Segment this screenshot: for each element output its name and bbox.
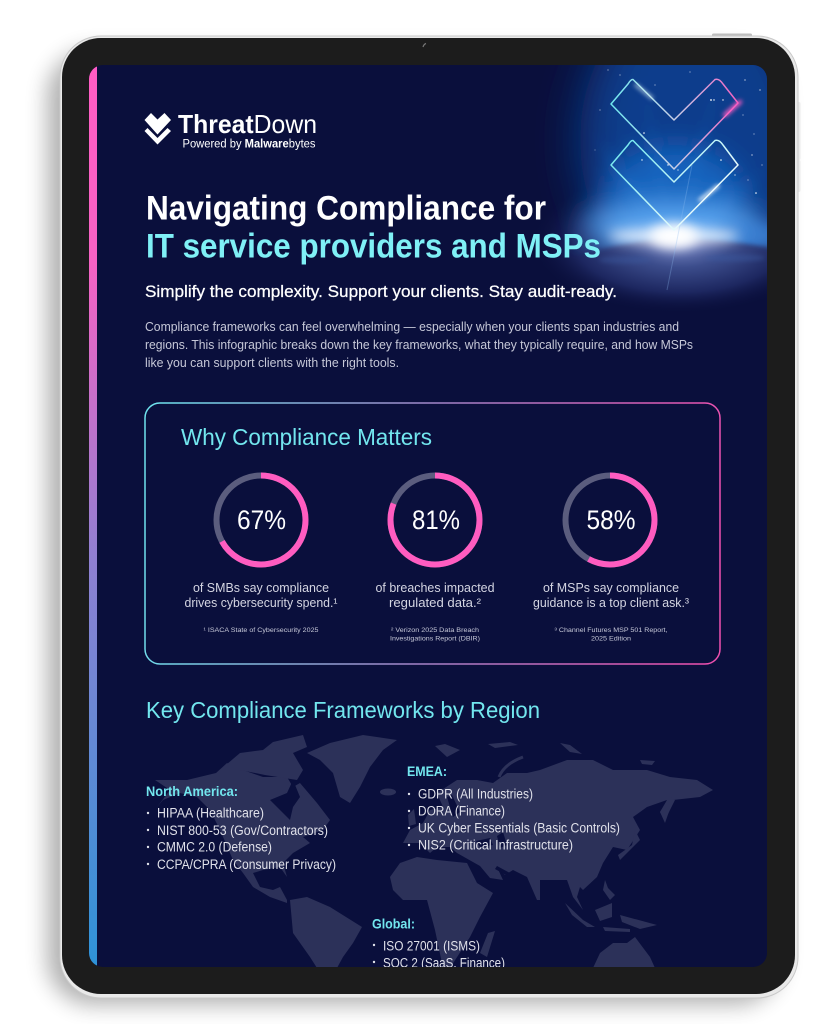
stat: 67%: ¹ ISACA State of Cybersecurity 2025: [204, 627, 319, 634]
region: north america: North America:: [146, 784, 238, 799]
panel heading: Why Compliance Matters: [181, 424, 432, 450]
region: global: ISO 27001 (ISMS): [383, 938, 480, 954]
section heading: frameworks by region: Key Compliance Frameworks by Region: [146, 697, 540, 723]
stat: 58%: of MSPs say compliance: [543, 581, 679, 595]
stat: 81%: regulated data.²: [389, 596, 481, 610]
region: north america: NIST 800-53 (Gov/Contractors): [157, 823, 328, 838]
screen: [89, 65, 767, 967]
stat: 67%: of SMBs say compliance: [193, 581, 329, 595]
stat: 81%: [376, 476, 495, 642]
logo tagline: Powered by Malwarebytes: [182, 138, 316, 150]
panel: why compliance matters: [145, 403, 720, 664]
hero earth: [552, 206, 767, 304]
neon chevrons logo: [611, 79, 740, 230]
title: IT service providers and MSPs: [146, 228, 601, 266]
stat: 58%: 2025 Edition: [591, 636, 631, 642]
stat: 81%: ² Verizon 2025 Data Breach: [391, 627, 479, 634]
title: [146, 190, 601, 266]
stat: 81%: Investigations Report (DBIR): [390, 636, 480, 642]
stat: 81%: of breaches impacted: [376, 581, 495, 595]
region: global: SOC 2 (SaaS, Finance): [383, 956, 505, 970]
tablet side buttons: [712, 34, 800, 192]
hero space image: [555, 65, 767, 252]
title: Navigating Compliance for: [146, 190, 546, 228]
stat: 81%: 81%: [412, 505, 460, 535]
world map: [155, 735, 713, 968]
stat: 58%: guidance is a top client ask.³: [533, 596, 689, 610]
stars: [595, 70, 762, 194]
region: global: [372, 918, 504, 967]
stat: 58%: ³ Channel Futures MSP 501 Report,: [554, 627, 668, 634]
stat: 67%: drives cybersecurity spend.¹: [184, 596, 338, 610]
region: EMEA: [407, 764, 620, 852]
region: EMEA: NIS2 (Critical Infrastructure): [418, 838, 573, 852]
region: EMEA: DORA (Finance): [418, 804, 505, 818]
stat: 67%: 67%: [237, 505, 286, 535]
region: north america: [146, 784, 336, 872]
screen background: [89, 65, 767, 967]
region: EMEA: UK Cyber Essentials (Basic Controls): [418, 820, 620, 836]
intro paragraph: regions. This infographic breaks down the key frameworks, what they typically require, and how MSPs: [145, 337, 693, 352]
icon: logo chevrons: [144, 113, 171, 144]
stat: 58%: [533, 476, 689, 642]
dark water: Hudson Bay and inland seas: [270, 780, 510, 875]
logo wordmark: ThreatDown: [178, 109, 317, 139]
side accent bar: [89, 65, 97, 967]
camera: [423, 44, 426, 47]
horizon sunrise: [599, 165, 765, 290]
intro paragraph: [145, 319, 693, 370]
intro paragraph: like you can support clients with the right tools.: [145, 355, 399, 370]
region: global: Global:: [372, 916, 415, 932]
stat: 67%: [184, 476, 338, 634]
subtitle: Simplify the complexity. Support your clients. Stay audit-ready.: [145, 283, 617, 301]
region: north america: CMMC 2.0 (Defense): [157, 840, 272, 854]
intro paragraph: Compliance frameworks can feel overwhelming — especially when your clients span industries and: [145, 319, 679, 334]
region: EMEA: GDPR (All Industries): [418, 786, 533, 802]
region: north america: HIPAA (Healthcare): [157, 806, 264, 820]
ThreatDown logo: [144, 113, 316, 150]
stat: 58%: 58%: [586, 505, 636, 535]
region: north america: CCPA/CPRA (Consumer Privacy): [157, 857, 336, 872]
region: EMEA: EMEA:: [407, 764, 447, 779]
